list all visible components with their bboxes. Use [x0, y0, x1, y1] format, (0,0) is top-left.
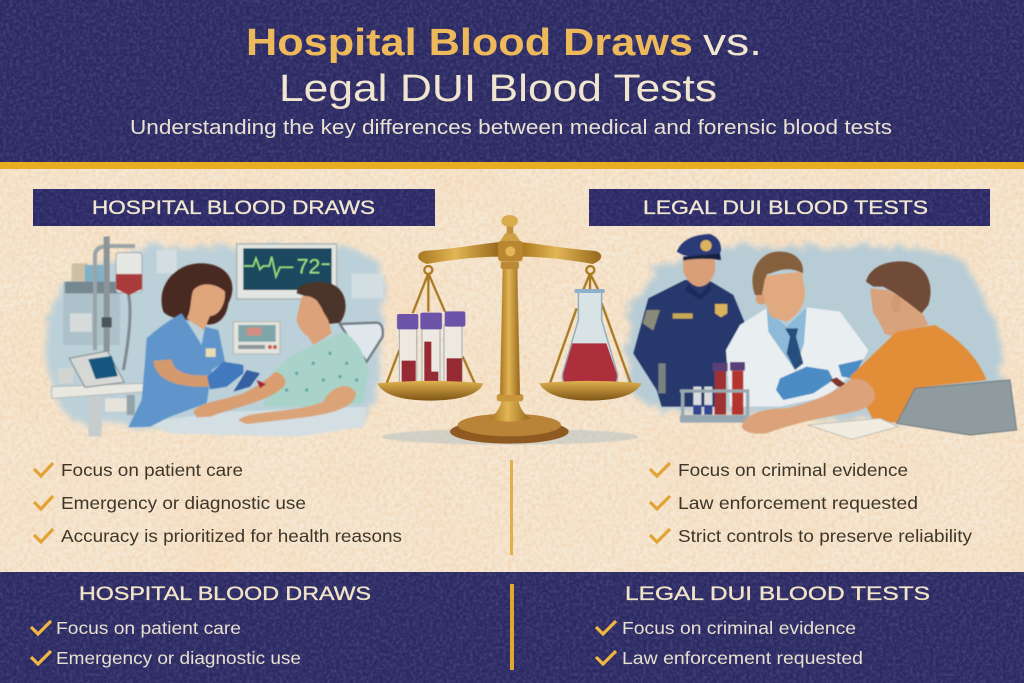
gold divider band	[0, 162, 1024, 169]
left key points list: Accuracy is prioritized for health reasons	[61, 526, 402, 546]
right panel heading: LEGAL DUI BLOOD TESTS	[643, 198, 928, 219]
right pan	[539, 381, 642, 401]
footer left summary	[31, 584, 371, 668]
footer left checks	[31, 621, 51, 664]
footer divider	[510, 584, 514, 670]
bedside table and device	[52, 351, 145, 437]
left panel heading	[33, 189, 435, 226]
left pan	[377, 381, 483, 401]
right key points list	[650, 460, 972, 546]
suspect in orange shirt	[742, 261, 987, 434]
chair back	[897, 380, 1017, 435]
left key points list: Focus on patient care	[61, 460, 243, 480]
title: Hospital Blood Draws	[246, 22, 693, 64]
hospital bed pillow	[340, 323, 383, 362]
right key points list: Focus on criminal evidence	[678, 460, 908, 480]
footer right checks	[596, 621, 616, 664]
center vertical divider	[510, 460, 513, 555]
check icons	[34, 463, 53, 542]
left key points list	[34, 460, 402, 546]
illustration: balance scale comparing blood tubes and flask	[377, 215, 642, 445]
footer left summary: HOSPITAL BLOOD DRAWS	[79, 584, 371, 605]
police officer	[633, 234, 745, 407]
small vitals monitor	[233, 322, 280, 354]
lab technician	[726, 252, 868, 407]
right panel heading	[589, 189, 990, 226]
test tube rack	[680, 362, 749, 423]
footer right summary	[596, 584, 930, 668]
footer right summary: Focus on criminal evidence	[622, 618, 856, 638]
title: vs.	[703, 22, 762, 64]
patient	[193, 282, 368, 424]
wall monitor: 72	[297, 254, 320, 278]
IV stand and bag	[63, 237, 142, 370]
footer band	[0, 572, 1024, 683]
erlenmeyer flask	[562, 289, 618, 386]
bed sheet	[147, 407, 367, 437]
illustration: nurse drawing blood from hospital patient	[45, 237, 387, 437]
footer right summary: Law enforcement requested	[622, 648, 863, 668]
header band	[0, 0, 1024, 163]
right pan chains	[550, 266, 631, 383]
left pan chains	[387, 266, 475, 384]
left panel heading: HOSPITAL BLOOD DRAWS	[92, 198, 375, 219]
check icons	[650, 463, 670, 542]
right key points list: Law enforcement requested	[678, 493, 918, 513]
paper sheet	[808, 418, 898, 439]
title	[246, 22, 762, 110]
right key points list: Strict controls to preserve reliability	[678, 526, 972, 546]
nurse	[128, 263, 260, 427]
footer left summary: Focus on patient care	[56, 618, 241, 638]
illustration: police officer and technician drawing DUI blood sample	[625, 234, 1017, 439]
scale base and column	[450, 262, 569, 444]
left key points list: Emergency or diagnostic use	[61, 493, 306, 513]
shadow	[382, 429, 638, 445]
footer left summary: Emergency or diagnostic use	[56, 648, 301, 668]
subtitle: Understanding the key differences between medical and forensic blood tests	[130, 117, 892, 139]
title: Legal DUI Blood Tests	[279, 68, 717, 110]
wall monitor	[237, 244, 337, 299]
scale beam	[418, 215, 601, 264]
blood tubes	[397, 311, 465, 386]
footer right summary: LEGAL DUI BLOOD TESTS	[625, 584, 930, 605]
